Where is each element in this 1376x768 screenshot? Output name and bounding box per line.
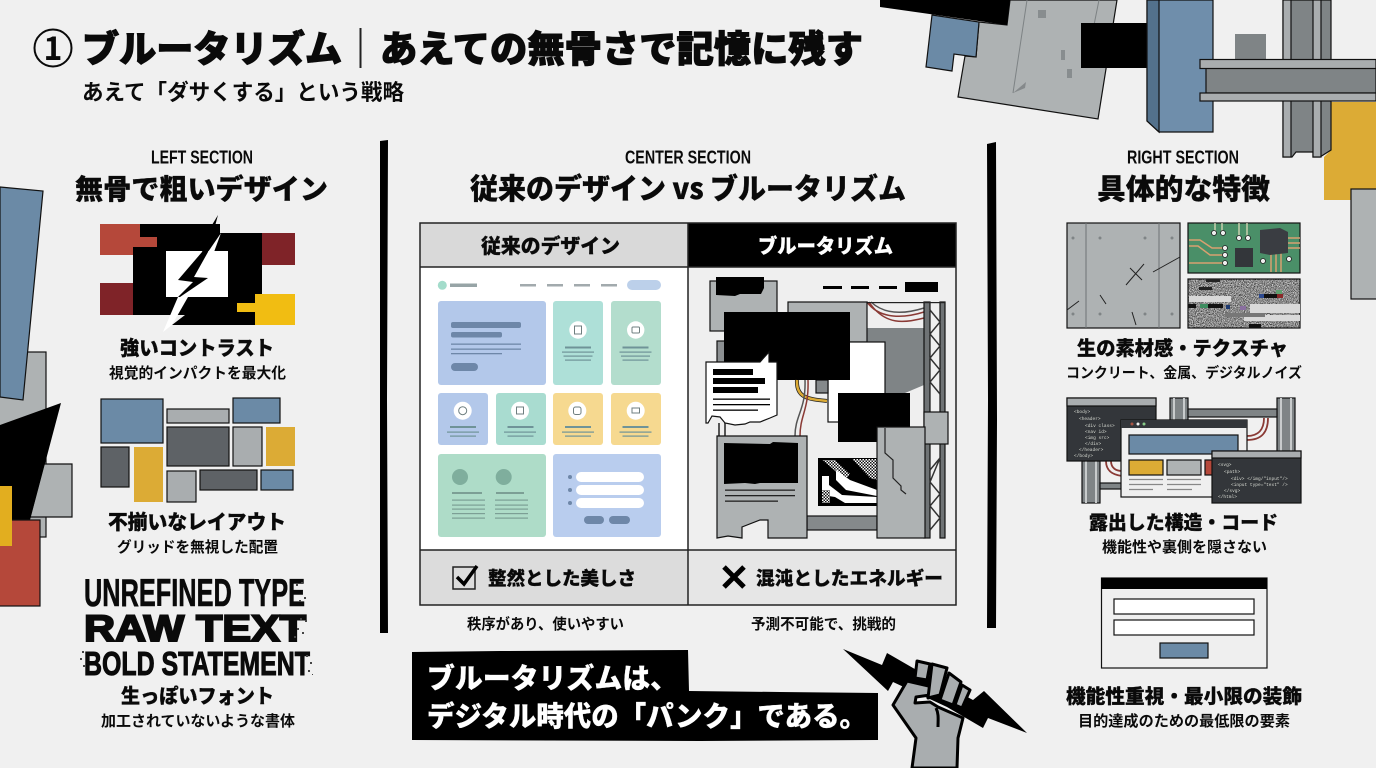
icon: strong contrast <box>100 215 295 332</box>
illustration: exposed structure and code: </div> <box>1085 441 1102 447</box>
header: conventional: 従来のデザイン <box>481 230 620 259</box>
title number <box>34 24 72 70</box>
illustration: exposed structure and code: </svg> <box>1224 488 1241 494</box>
illustration: exposed structure and code: <svg> <box>1218 462 1232 468</box>
decoration: top right construction <box>880 0 1376 299</box>
raw type sample: RAW TEXT <box>84 608 306 649</box>
illustration: exposed structure and code: <img src> <box>1085 435 1110 441</box>
footer: brutalism <box>724 564 943 591</box>
caption: exposed structure: 露出した構造・コード <box>1089 508 1278 535</box>
illustration: exposed structure and code: </html> <box>1218 494 1237 500</box>
caption: uneven layout: 不揃いなレイアウト <box>108 506 286 535</box>
caption: minimal decoration: 機能性重視・最小限の装飾 <box>1066 680 1302 709</box>
caption sub: strong contrast: 視覚的インパクトを最大化 <box>109 362 286 383</box>
left section label: LEFT SECTION <box>151 148 253 168</box>
panel: right section <box>1066 148 1302 731</box>
icon: fist with lightning <box>843 649 1027 768</box>
right section label: RIGHT SECTION <box>1127 148 1239 168</box>
footer: conventional <box>453 565 636 591</box>
title <box>34 19 863 107</box>
wireframe: brutalist design <box>706 277 948 538</box>
callout banner: デジタル時代の「パンク」である。 <box>427 695 867 735</box>
icon: cross <box>724 567 744 587</box>
caption sub: exposed structure: 機能性や裏側を隠さない <box>1102 536 1267 557</box>
texture: concrete <box>1067 223 1180 328</box>
title number: 1 <box>44 24 62 70</box>
panel: center section <box>420 148 956 634</box>
comparison table <box>420 223 956 605</box>
texture: circuit board <box>1188 223 1300 273</box>
center heading: 従来のデザイン vs ブルータリズム <box>470 166 906 208</box>
callout banner: ブルータリズムは、 <box>427 657 678 697</box>
caption sub: raw texture: コンクリート、金属、デジタルノイズ <box>1066 362 1302 383</box>
raw type sample: UNREFINED TYPE <box>84 572 305 615</box>
texture: digital noise <box>1188 279 1300 328</box>
illustration: exposed structure and code <box>1067 398 1301 503</box>
center section label: CENTER SECTION <box>625 148 751 168</box>
raw type sample: BOLD STATEMENT <box>84 645 310 682</box>
caption sub: uneven layout: グリッドを無視した配置 <box>117 536 278 557</box>
decoration: left construction <box>0 187 72 606</box>
subtitle: あえて「ダサくする」という戦略 <box>82 75 404 107</box>
illustration: exposed structure and code: <nav id> <box>1085 429 1107 435</box>
label: chaotic energy: 混沌としたエネルギー <box>756 564 943 591</box>
caption sub: minimal decoration: 目的達成のための最低限の要素 <box>1078 710 1290 731</box>
icon: check box <box>453 566 477 589</box>
illustration: exposed structure and code: <div class> <box>1085 423 1115 429</box>
title divider <box>360 28 362 68</box>
wireframe: conventional design <box>438 280 661 537</box>
caption sub: raw font: 加工されていないような書体 <box>101 710 295 731</box>
title heading right: あえての無骨さで記憶に残す <box>380 19 863 73</box>
illustration: exposed structure and code: </body> <box>1074 453 1093 459</box>
raw type sample <box>80 572 313 682</box>
illustration: minimal form <box>1101 578 1267 668</box>
callout banner <box>412 650 878 741</box>
note: brutalism: 予測不可能で、挑戦的 <box>751 613 896 634</box>
illustration: exposed structure and code: <div> </img/"input"/> <box>1231 476 1288 482</box>
icon: uneven layout <box>101 398 295 502</box>
section dividers <box>380 140 997 633</box>
title heading left: ブルータリズム <box>82 19 342 73</box>
illustration: exposed structure and code: <header> <box>1079 416 1101 422</box>
panel: left section <box>75 148 328 731</box>
right heading: 具体的な特徴 <box>1097 167 1270 208</box>
header: brutalism: ブルータリズム <box>758 230 893 259</box>
caption: strong contrast: 強いコントラスト <box>120 332 274 361</box>
note: conventional: 秩序があり、使いやすい <box>467 613 624 634</box>
illustration: exposed structure and code: <path> <box>1224 469 1241 475</box>
label: orderly beauty: 整然とした美しさ <box>488 565 636 591</box>
illustration: exposed structure and code: </header> <box>1079 447 1104 453</box>
illustration: exposed structure and code: <input type="text" /> <box>1231 482 1288 488</box>
left heading: 無骨で粗いデザイン <box>75 168 328 208</box>
caption: raw texture: 生の素材感・テクスチャ <box>1077 332 1288 361</box>
caption: raw font: 生っぽいフォント <box>121 680 274 709</box>
illustration: exposed structure and code: <body> <box>1074 409 1091 415</box>
